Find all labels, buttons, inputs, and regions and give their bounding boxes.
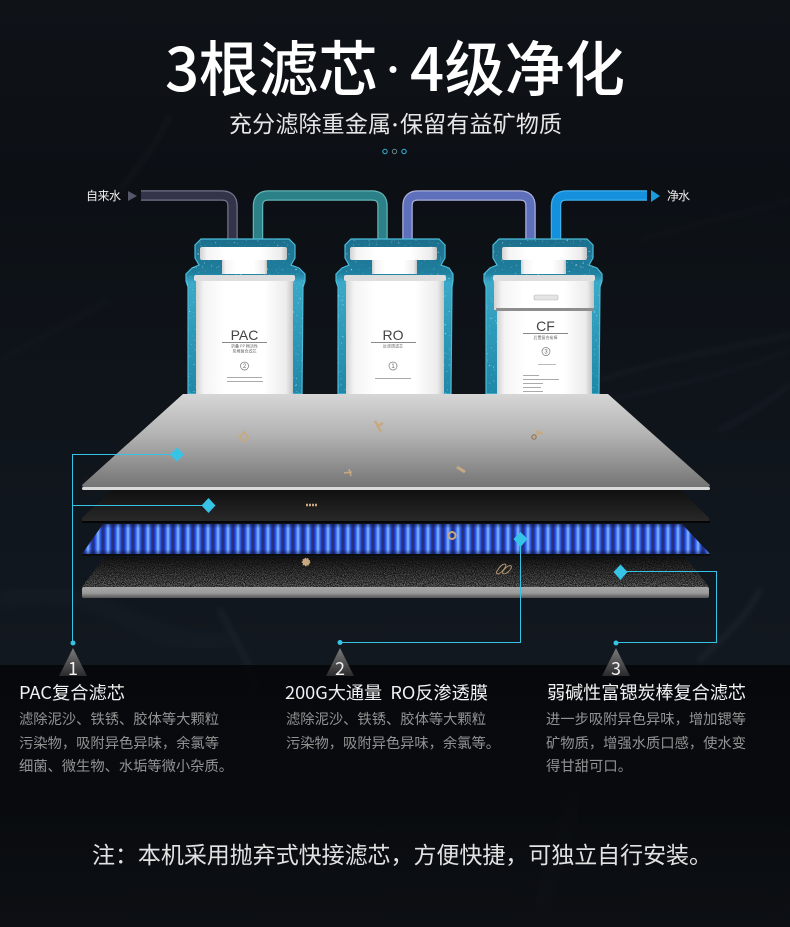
cartridge: CF — [484, 239, 602, 394]
footnote: 注：本机采用抛弃式快接滤芯，方便快捷，可独立自行安装。 — [92, 836, 712, 870]
cartridge: RO: 反渗透滤芯 — [383, 342, 403, 350]
text block 2: RO membrane: 200G大通量 RO反渗透膜 — [285, 680, 488, 705]
title: 4级净化 — [410, 22, 625, 109]
text block 1: PAC composite filter: 滤除泥沙、铁锈、胶体等大颗粒 — [19, 708, 219, 729]
subtitle — [229, 105, 562, 139]
text block 3: strontium carbon filter: 弱碱性富锶炭棒复合滤芯 — [547, 679, 746, 705]
text block 3: strontium carbon filter: 矿物质，增强水质口感，使水变 — [546, 732, 746, 753]
label: tap water inlet: 自来水 — [86, 187, 121, 204]
layer 1: top plate — [82, 394, 710, 490]
cartridge: PAC: 折叠 PP 棉活性 — [231, 342, 258, 350]
cartridge: RO: 1 — [391, 364, 395, 370]
contaminant specks — [238, 421, 543, 574]
cartridge label: CF: CF — [536, 318, 555, 334]
title: · — [378, 46, 408, 90]
arrow: outlet — [651, 190, 660, 202]
subtitle: · — [387, 112, 403, 136]
text block 1: PAC composite filter — [19, 680, 233, 776]
pipe: inlet — [141, 196, 232, 240]
cartridge label: PAC: PAC — [231, 327, 258, 343]
marker 2: 2 — [335, 655, 345, 681]
text block 3: strontium carbon filter: 得甘甜可口。 — [546, 755, 632, 776]
text block 2: RO membrane: 污染物，吸附异色异味，余氯等。 — [286, 732, 500, 753]
pipe: outlet — [556, 196, 647, 240]
text block 3: strontium carbon filter: 进一步吸附异色异味，增加锶等 — [546, 708, 746, 729]
layer 3: RO membrane stripes — [82, 524, 710, 556]
cartridge: PAC: 炭棒复合滤芯 — [232, 348, 256, 354]
pipe: RO to CF — [408, 196, 530, 240]
arrow: inlet — [128, 191, 137, 201]
cartridge label: RO: RO — [382, 327, 404, 343]
cartridge: PAC — [186, 239, 305, 394]
marker 3: 3 — [611, 655, 621, 681]
marker 1: 1 — [68, 655, 78, 681]
callout line 3: connector to carbon layer — [614, 564, 716, 646]
cartridge: CF: 3 — [544, 350, 548, 356]
text block 2: RO membrane — [285, 680, 500, 753]
cartridge: CF: 后置复合炭棒 — [534, 334, 558, 341]
layer 4: carbon filter — [80, 555, 712, 598]
cartridge: RO — [336, 239, 453, 394]
bottom dark panel — [0, 665, 790, 927]
title — [165, 22, 625, 109]
pipe: PAC to RO — [258, 196, 382, 240]
label: clean water outlet: 净水 — [667, 187, 690, 204]
cartridge: PAC: 2 — [243, 364, 247, 370]
text block 1: PAC composite filter: 细菌、微生物、水垢等微小杂质。 — [19, 755, 233, 776]
layer 2: black plate — [82, 490, 710, 523]
marker 1 — [59, 648, 87, 681]
subtitle: 保留有益矿物质 — [400, 105, 562, 139]
callout line 1: connector to top and black plates — [70, 448, 216, 646]
marker 3 — [602, 648, 630, 681]
callout line 2: connector to RO membrane — [338, 532, 528, 645]
text block 3: strontium carbon filter — [546, 679, 746, 776]
text block 1: PAC composite filter: 污染物，吸附异色异味，余氯等 — [19, 732, 219, 753]
marker 2 — [326, 648, 354, 681]
text block 2: RO membrane: 滤除泥沙、铁锈、胶体等大颗粒 — [286, 708, 486, 729]
decorative dots — [383, 149, 406, 154]
subtitle: 充分滤除重金属 — [229, 105, 391, 139]
text block 1: PAC composite filter: PAC复合滤芯 — [19, 680, 125, 705]
title: 3根滤芯 — [165, 22, 378, 109]
